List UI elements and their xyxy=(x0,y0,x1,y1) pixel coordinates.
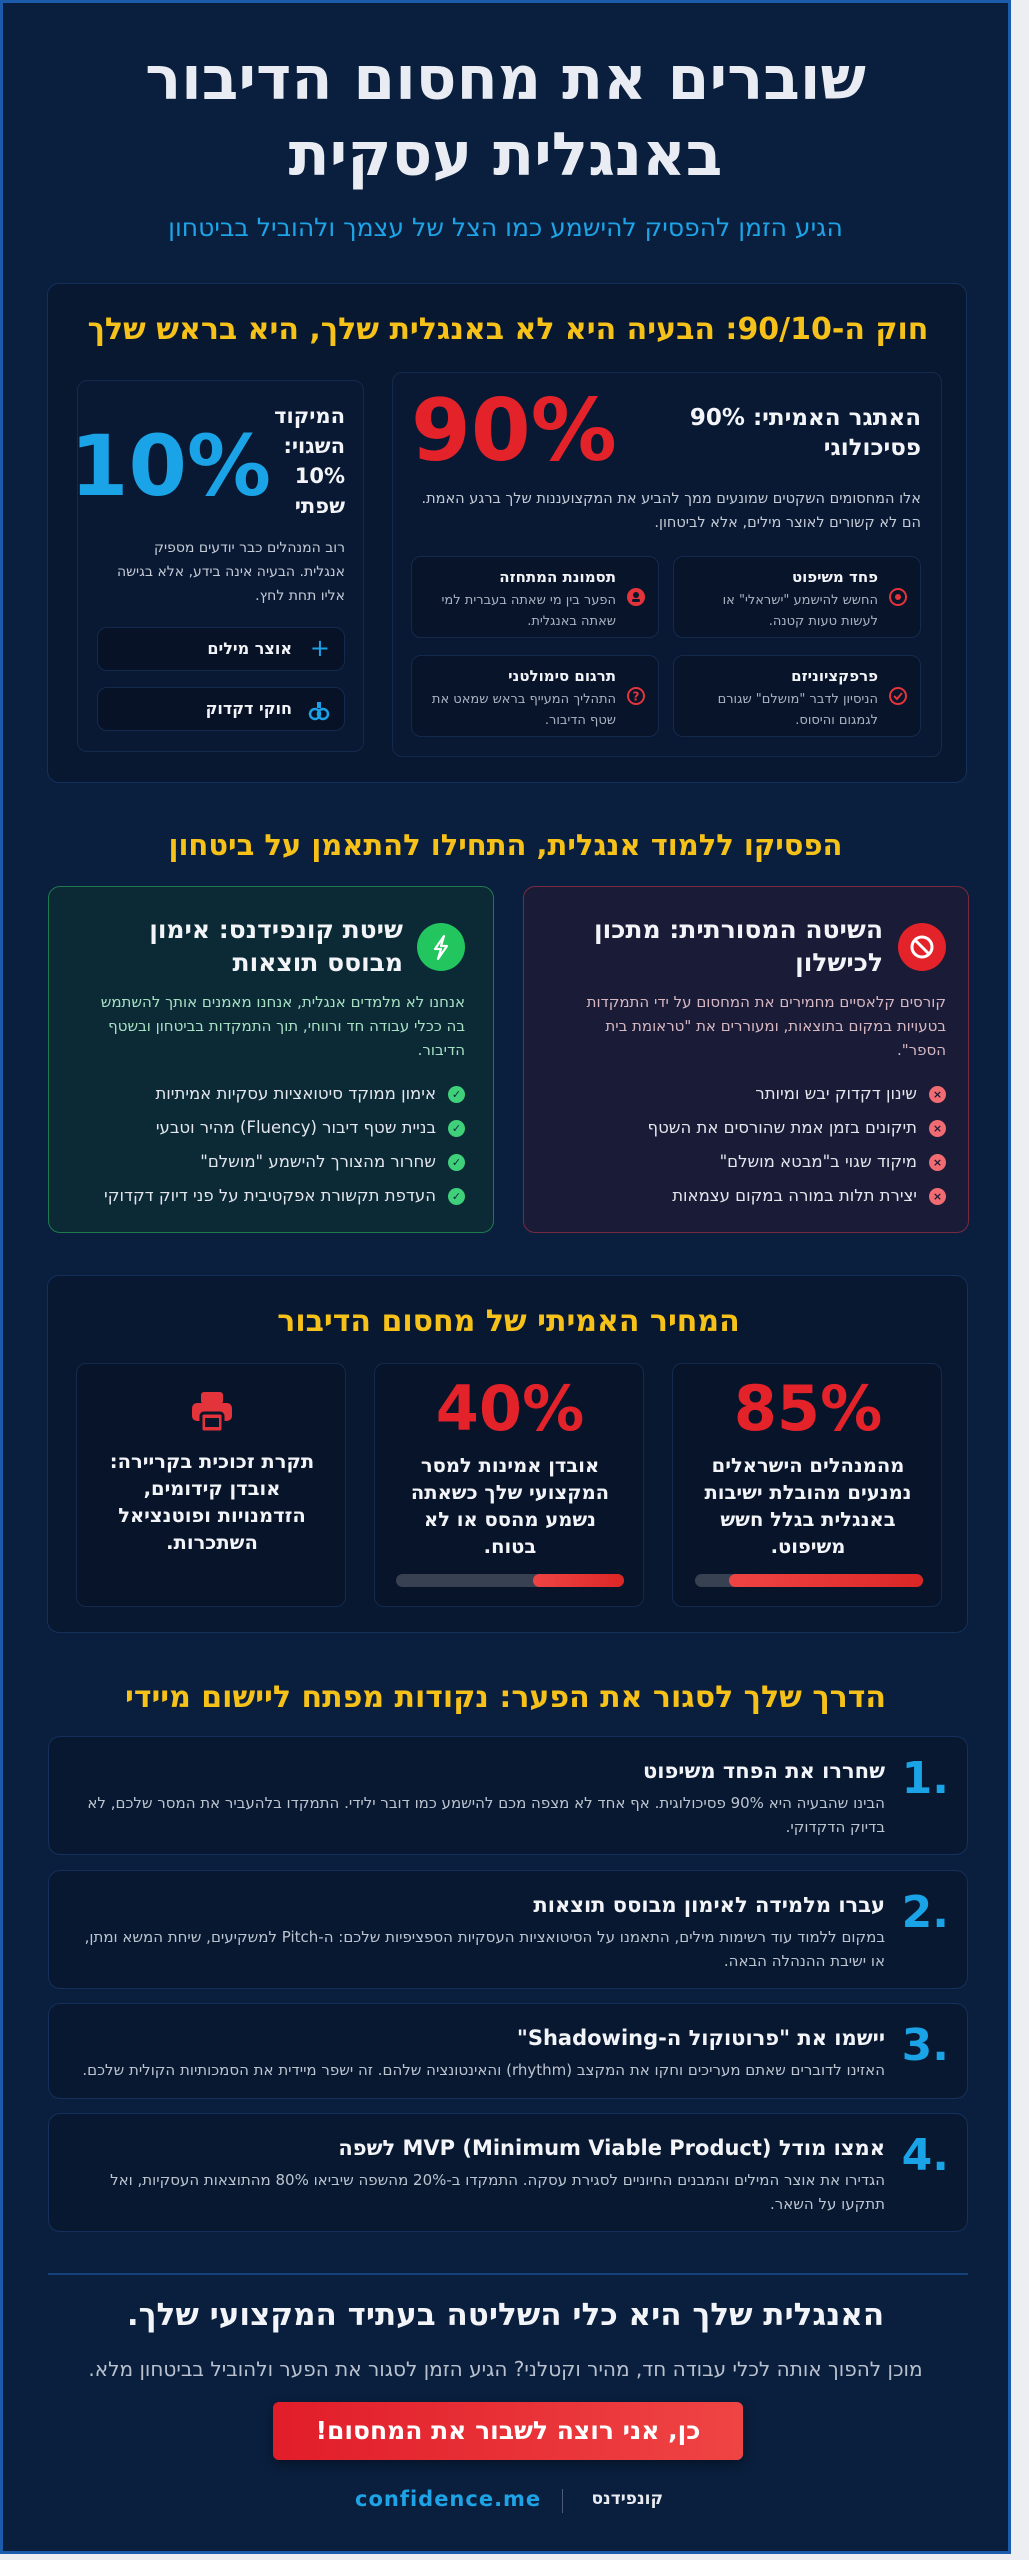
icon: question: ? xyxy=(633,690,640,704)
step 1: שחררו את הפחד משיפוט xyxy=(643,1759,885,1783)
step 1 xyxy=(48,1736,968,1855)
step 1: 1. xyxy=(902,1753,949,1804)
list: failures: תיקונים בזמן אמת שהורסים את השטף xyxy=(648,1118,917,1137)
heading: 90/10: חוק ה-90/10: הבעיה היא לא באנגלית שלך, היא בראש שלך xyxy=(88,312,928,347)
list: benefits: שחרור מהצורך להישמע "מושלם" xyxy=(200,1152,436,1171)
panel: traditional method xyxy=(523,886,969,1233)
panel: 90/10 rule xyxy=(47,283,967,783)
panel: true cost xyxy=(47,1275,968,1633)
card: 40%: 40% xyxy=(436,1372,584,1445)
sub-card: simultaneous translation xyxy=(411,655,659,737)
CTA button xyxy=(273,2402,743,2460)
heading 90%: האתגר האמיתי: 90% פסיכולוגי xyxy=(690,405,921,461)
step 3 xyxy=(48,2003,968,2099)
list: failures: שינון דקדוק יבש ומיותר xyxy=(755,1084,917,1103)
list: benefits xyxy=(104,1084,465,1205)
brand: קונפידנס xyxy=(592,2489,663,2509)
list: failures: × xyxy=(933,1122,942,1135)
sub-card: impostor xyxy=(411,556,659,638)
button: grammar: חוקי דקדוק xyxy=(206,699,292,718)
list: benefits: בניית שטף דיבור (Fluency) מהיר וטבעי xyxy=(156,1118,436,1137)
icon: question xyxy=(627,687,645,705)
step 2: במקום ללמוד עוד רשימות מילים, התאמנו על הסיטואציות העסקיות הספציפיות שלכם: ה-Pitch למשקיעים, שיחת המשא ומתן, או ישיבת ההנהלה הבאה. xyxy=(85,1928,885,1970)
big 90%: 90% xyxy=(411,381,617,481)
paragraph: אלו המחסומים השקטים שמונעים ממך להביע את המקצועננות שלך ברגע האמת. הם לא קשורים לאוצר מילים, אלא לביטחון. xyxy=(422,491,921,531)
heading: שיטת קונפידנס: אימון מבוסס תוצאות xyxy=(149,915,403,977)
sub-card: fear of judgement xyxy=(673,556,921,638)
card: 85%: 85% xyxy=(734,1372,882,1445)
heading 10%: המיקוד השגוי: 10% שפתי xyxy=(274,404,345,518)
footer text: מוכן להפוך אותה לכלי עבודה חד, מהיר וקטלני? הגיע הזמן לסגור את הפער ולהוביל בביטחון מלא. xyxy=(88,2357,923,2381)
list: failures xyxy=(648,1084,946,1205)
heading: השיטה המסורתית: מתכון לכישלון xyxy=(594,915,883,977)
icon: check circle xyxy=(889,687,907,705)
step 2: 2. xyxy=(902,1887,949,1938)
heading: stop learning: הפסיקו ללמוד אנגלית, התחילו להתאמן על ביטחון xyxy=(169,828,842,862)
list: benefits: אימון ממוקד סיטואציות עסקיות אמיתיות xyxy=(155,1084,436,1103)
title: שוברים את מחסום הדיבור xyxy=(145,44,866,114)
footer heading: האנגלית שלך היא כלי השליטה בעתיד המקצועי שלך. xyxy=(127,2297,884,2333)
sub-card: simultaneous translation: תרגום סימולטני xyxy=(508,667,616,685)
card: glass ceiling: תקרת זכוכית בקריירה: אובדן קידומים, הזדמנויות ופוטנציאל השתכרות. xyxy=(110,1450,314,1554)
card: glass ceiling xyxy=(76,1363,346,1607)
icon: eye xyxy=(889,588,907,606)
card: 10% linguistic xyxy=(77,380,364,752)
sub-card: impostor: הפער בין מי שאתה בעברית למי שאתה באנגלית. xyxy=(442,593,616,629)
heading: true cost: המחיר האמיתי של מחסום הדיבור xyxy=(277,1304,740,1339)
big 10%: 10% xyxy=(70,417,271,515)
list: benefits: העדפת תקשורת אפקטיבית על פני דיוק דקדוקי xyxy=(104,1186,436,1205)
step 2 xyxy=(48,1870,968,1989)
bar 85% xyxy=(695,1574,923,1587)
subtitle: הגיע הזמן להפסיק להישמע כמו הצל של עצמך ולהוביל בביטחון xyxy=(168,213,843,242)
button: vocabulary xyxy=(97,627,345,671)
icon: ban xyxy=(898,923,946,971)
CTA button: כן, אני רוצה לשבור את המחסום! xyxy=(316,2416,700,2445)
step 3: 3. xyxy=(902,2020,949,2071)
card: 40% xyxy=(374,1363,644,1607)
sub-card: perfectionism: הניסיון לדבר "מושלם" שגורם לגמגום והיסוס. xyxy=(718,692,878,728)
panel: confidence method xyxy=(48,886,494,1233)
list: benefits: ✓ xyxy=(452,1156,461,1169)
list: failures: × xyxy=(933,1156,942,1169)
icon: printer xyxy=(192,1392,232,1430)
step 4: אמצו מודל MVP (Minimum Viable Product) לשפה xyxy=(338,2136,885,2160)
button: vocabulary: + xyxy=(310,634,330,662)
brand: confidence.me xyxy=(355,2487,541,2511)
list: failures: × xyxy=(933,1088,942,1101)
title xyxy=(145,44,866,190)
step 4: 4. xyxy=(902,2130,949,2181)
step 2: עברו מלמידה לאימון מבוסס תוצאות xyxy=(533,1893,885,1917)
list: benefits: ✓ xyxy=(452,1122,461,1135)
card: 85%: מהמנהלים הישראלים נמנעים מהובלת ישיבות באנגלית בגלל חשש משיפוט. xyxy=(704,1454,912,1558)
list: benefits: ✓ xyxy=(452,1190,461,1203)
card: 40%: אובדן אמינות למסר המקצועי שלך כשאתה נשמע מהסס או לא בטוח. xyxy=(411,1454,609,1558)
sub-card: impostor: תסמונת המתחזה xyxy=(499,568,616,586)
sub-card: simultaneous translation: התהליך המעייף בראש שמאט את שטף הדיבור. xyxy=(432,692,616,728)
card: 90% psychological xyxy=(392,372,942,757)
sub-card: fear of judgement: החשש להישמע "ישראלי" או לעשות טעות קטנה. xyxy=(723,593,878,629)
sub-card: fear of judgement: פחד משיפוט xyxy=(792,568,878,586)
icon: lightning xyxy=(417,923,465,971)
step 4 xyxy=(48,2113,968,2232)
step 3: האזינו לדוברים שאתם מעריכים וחקו את המקצב (rhythm) והאינטונציה שלהם. זה ישפר מיידית את הסמכותיות הקולית שלכם. xyxy=(82,2061,885,2079)
card: 85% xyxy=(672,1363,942,1607)
title: באנגלית עסקית xyxy=(289,120,722,190)
brand xyxy=(355,2487,663,2513)
button: grammar xyxy=(97,687,345,731)
sub-card: perfectionism: פרפקציוניזם xyxy=(791,667,878,685)
bar 40% xyxy=(396,1574,624,1587)
paragraph: רוב המנהלים כבר יודעים מספיק אנגלית. הבעיה אינה בידע, אלא בגישה אליו תחת לחץ. xyxy=(117,540,345,604)
heading: your path: הדרך שלך לסגור את הפער: נקודות מפתח ליישום מיידי xyxy=(125,1680,886,1715)
list: benefits: ✓ xyxy=(452,1088,461,1101)
button: vocabulary: אוצר מילים xyxy=(207,639,292,658)
paragraph: קורסים קלאסיים מחמירים את המחסום על ידי התמקדות בטעויות במקום בתוצאות, ומעוררים את "טראומת בית הספר". xyxy=(587,993,946,1059)
list: failures: יצירת תלות במורה במקום עצמאות xyxy=(672,1186,917,1205)
list: failures: × xyxy=(933,1190,942,1203)
list: failures: מיקוד שגוי ב"מבטא מושלם" xyxy=(720,1152,917,1171)
paragraph: אנחנו לא מלמדים אנגלית, אנחנו מאמנים אותך להשתמש בה ככלי עבודה חד ורווחי, תוך התמקדות בביטחון ובשטף הדיבור. xyxy=(101,993,465,1059)
step 3: יישמו את "פרוטוקול ה-Shadowing" xyxy=(517,2026,885,2050)
step 1: הבינו שהבעיה היא 90% פסיכולוגית. אף אחד לא מצפה מכם להישמע כמו דובר ילידי. התמקדו בלהעביר את המסר שלכם, לא בדיוק הדקדוקי. xyxy=(87,1794,885,1836)
icon: person xyxy=(627,588,645,606)
step 4: הגדירו את אוצר המילים והמבנים החיוניים לסגירת עסקה. התמקדו ב-20% מהשפה שיביאו 80% מהתוצאות העסקיות, ואל תתקעו על השאר. xyxy=(110,2171,885,2213)
sub-card: perfectionism xyxy=(673,655,921,737)
